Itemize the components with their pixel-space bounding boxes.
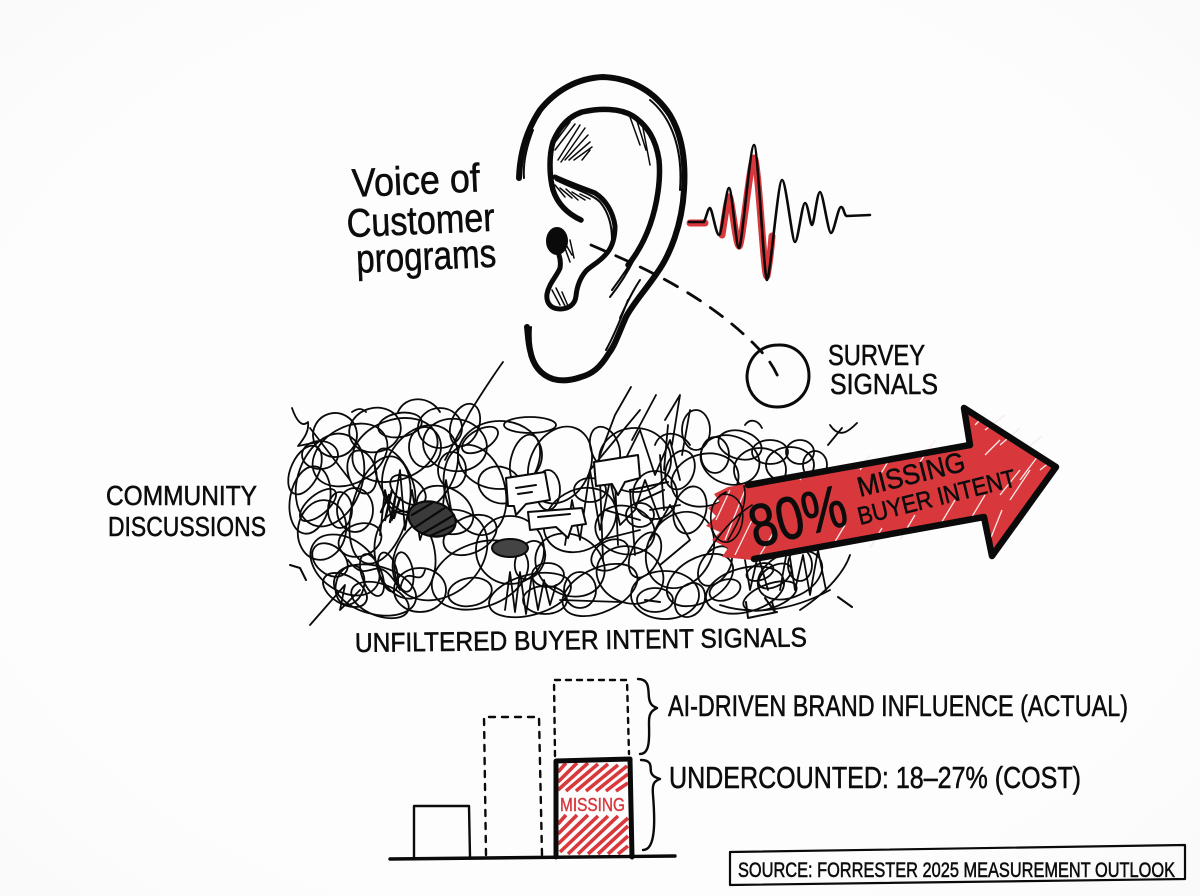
scribble over arrow tail <box>708 486 752 552</box>
title: Voice of Customer programs: Customer <box>346 196 495 246</box>
community discussions label: COMMUNITY <box>106 480 257 511</box>
speech bubble: scribble reply <box>528 508 586 538</box>
speech bubble: scribble message <box>506 472 550 515</box>
community discussions label <box>106 480 266 542</box>
dashed connector <box>591 245 780 382</box>
bar: dashed medium <box>484 717 542 855</box>
hatched blob: dark oval <box>404 496 460 542</box>
icon: ear <box>519 77 684 380</box>
ear hatching <box>552 117 650 308</box>
chart baseline <box>390 856 675 859</box>
bubble text strokes <box>516 482 668 517</box>
label: undercounted cost: UNDERCOUNTED: 18–27% (COST) <box>669 760 1081 795</box>
bar: measured small <box>414 806 470 857</box>
bar: missing outline <box>556 759 632 857</box>
arrow red fill <box>706 407 1057 560</box>
wave red highlight <box>690 158 772 276</box>
speech bubble: scribble top <box>594 455 640 495</box>
survey signals label <box>828 340 938 401</box>
bar: missing label: MISSING <box>560 795 625 815</box>
scribble tangle of discussion signals <box>281 362 857 627</box>
title: Voice of Customer programs: Voice of <box>351 156 482 206</box>
scribble spikes <box>292 362 857 625</box>
survey signals label: SURVEY <box>828 340 925 372</box>
arrow outline <box>748 408 1056 559</box>
arrow text: missing: MISSING <box>854 446 968 503</box>
source box <box>730 845 1185 885</box>
hatched blob: small oval <box>492 539 528 557</box>
community discussions label: DISCUSSIONS <box>108 511 266 542</box>
title: Voice of Customer programs: programs <box>355 232 497 282</box>
scribble floating loops <box>352 399 762 450</box>
bar red hatching <box>558 763 628 854</box>
bar: dashed tall <box>554 680 629 756</box>
survey signals label: SIGNALS <box>830 369 938 401</box>
arrow text: 80%: 80% <box>742 472 853 561</box>
arrow text: buyer intent: BUYER INTENT <box>855 464 1019 531</box>
sound wave <box>689 145 870 280</box>
arrow hatching <box>716 415 1050 555</box>
brace: undercounted <box>641 760 660 850</box>
hatched blob: sliver <box>381 490 400 522</box>
title: Voice of Customer programs <box>344 156 497 282</box>
brace: actual <box>638 679 657 754</box>
caption: unfiltered buyer intent signals: UNFILTERED BUYER INTENT SIGNALS <box>355 622 807 658</box>
arrow: 80% missing buyer intent <box>706 407 1057 561</box>
wave line <box>689 145 870 280</box>
icon: survey circle <box>747 345 809 407</box>
bar chart: undercounting <box>390 679 675 859</box>
icon: ear canal blob <box>547 228 567 254</box>
scribble debris <box>290 565 852 618</box>
